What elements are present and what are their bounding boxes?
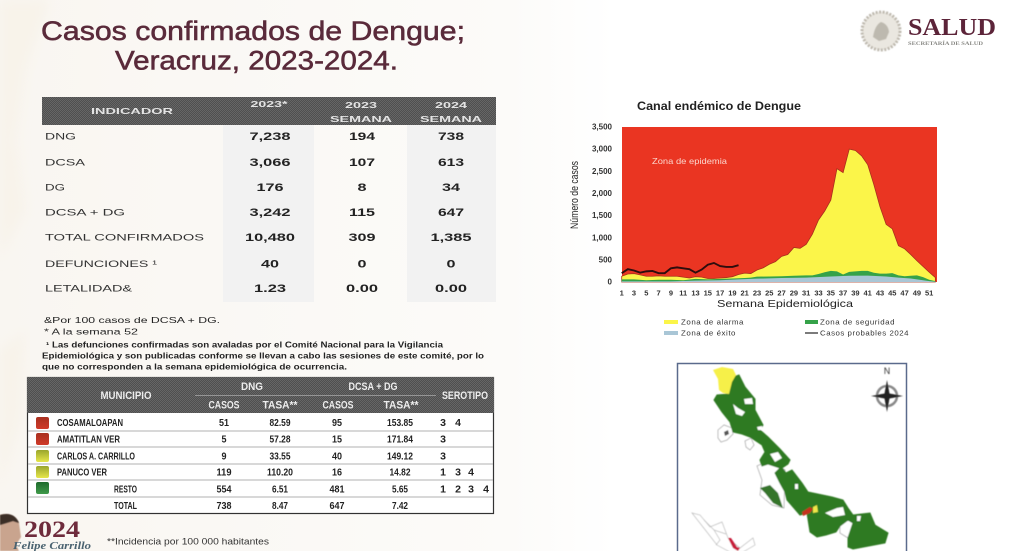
row: Resto: 481 [330, 484, 345, 496]
chart legend [664, 318, 909, 338]
row: Cosamaloapan: 51 [219, 417, 229, 429]
chart title: Canal endémico de Dengue [637, 101, 801, 113]
row: Carlos A. Carrillo: 149.12 [387, 450, 413, 462]
x axis: 31 [802, 288, 810, 298]
y axis: 0 [608, 278, 613, 286]
x axis: 23 [753, 288, 761, 298]
row: defunciones [45, 258, 456, 270]
icon: compass [871, 366, 903, 412]
table header: 2023 [345, 100, 377, 110]
row: Amatitlan: AMATITLAN VER [57, 434, 120, 446]
logo: Salud: SECRETARÍA DE SALUD [908, 39, 983, 47]
y axis: 2,000 [592, 189, 613, 198]
row: Panuco: 14.82 [390, 466, 411, 478]
row: Resto: 6.51 [272, 484, 288, 496]
x axis [620, 288, 933, 310]
row: DG: DG [45, 182, 65, 194]
x axis: 37 [839, 288, 847, 298]
map: Mexico inset [692, 513, 755, 551]
row: DG: 8 [358, 182, 366, 194]
row: DNG [45, 131, 464, 143]
map: white gaps [733, 398, 861, 521]
x axis: 35 [827, 288, 835, 298]
row: Panuco: PANUCO VER [57, 466, 107, 478]
row: Carlos A. Carrillo [36, 450, 446, 462]
x axis: 1 [620, 288, 624, 298]
map: Carlos A. Carrillo yellow [813, 505, 818, 513]
row: letalidad [45, 283, 467, 295]
chart legend: Casos probables 2024 [820, 328, 909, 338]
x axis: 43 [876, 288, 884, 298]
row: Panuco: 3 [455, 466, 461, 478]
row: Total [114, 500, 408, 512]
row: DCSA: 613 [438, 157, 464, 169]
row: Resto: 1 [440, 484, 446, 496]
row: DCSA + DG: DCSA + DG [45, 208, 125, 218]
municipios header: DCSA + DG [348, 381, 398, 393]
row: defunciones: DEFUNCIONES ¹ [45, 259, 157, 270]
municipios header: CASOS [322, 400, 354, 412]
map: green municipalities [714, 375, 888, 549]
row: Total: 738 [216, 500, 232, 512]
row: DNG: 7,238 [250, 131, 290, 143]
logo: Salud: SALUD [908, 15, 996, 41]
table: indicadores [42, 97, 496, 302]
chart: canal endémico de Dengue [569, 101, 937, 338]
logo: Salud [862, 12, 996, 50]
x axis: 7 [657, 288, 661, 298]
footnotes: &Por 100 casos de DCSA + DG. [44, 316, 220, 325]
table header [42, 97, 496, 125]
municipios header [27, 377, 494, 413]
footnotes: que no corresponden a la semana epidemiológica de ocurrencia. [42, 362, 347, 372]
row: Resto: 5.65 [392, 484, 408, 496]
municipios header: MUNICIPIO [100, 390, 152, 402]
x axis: 27 [777, 288, 786, 298]
x axis: 45 [888, 288, 896, 298]
row: DCSA + DG: 115 [349, 207, 375, 219]
x axis: 19 [728, 288, 737, 298]
x axis: 51 [925, 288, 933, 298]
row: Panuco [36, 466, 474, 478]
row: total confirmados: TOTAL CONFIRMADOS [45, 232, 204, 244]
map: Veracruz [678, 364, 906, 551]
row: total confirmados: 1,385 [430, 232, 472, 244]
row: defunciones: 0 [358, 258, 366, 270]
table header: INDICADOR [91, 106, 173, 116]
municipios header: DNG [241, 381, 263, 393]
table header: SEMANA [330, 114, 392, 124]
row: Carlos A. Carrillo: 33.55 [270, 450, 291, 462]
row: Cosamaloapan [36, 417, 461, 429]
y axis [569, 122, 613, 286]
row: Amatitlan: 171.84 [387, 434, 413, 446]
y axis: 3,000 [592, 144, 613, 154]
x axis: 47 [900, 288, 909, 298]
row: DNG: 738 [438, 131, 464, 143]
row: total confirmados: 10,480 [245, 232, 295, 244]
row: Amatitlan: 15 [332, 434, 342, 446]
x axis: 17 [716, 288, 724, 298]
y axis: 1,000 [592, 234, 613, 242]
row: DG [45, 182, 461, 194]
row: DG: 34 [442, 182, 461, 194]
row: Carlos A. Carrillo: 9 [222, 450, 227, 462]
row: Amatitlan: 5 [222, 434, 227, 446]
x axis: 21 [741, 288, 749, 298]
row: Cosamaloapan: COSAMALOAPAN [57, 417, 123, 429]
row: DG: 176 [256, 182, 284, 194]
plot areas [622, 127, 937, 282]
x axis: 5 [644, 288, 648, 298]
x axis: 41 [864, 288, 872, 298]
row: Resto: 2 [455, 484, 461, 496]
municipios header: SEROTIPO [442, 390, 488, 402]
row: DCSA + DG [45, 207, 464, 219]
table header: 2024 [435, 100, 467, 110]
row: Total: 7.42 [392, 500, 408, 512]
row: DNG: 194 [349, 131, 376, 143]
x axis: 13 [691, 288, 700, 298]
x axis: 49 [913, 288, 921, 298]
title: Veracruz, 2023-2024. [115, 46, 398, 76]
row: Resto: 554 [216, 484, 232, 496]
footnotes: Epidemiológica y son publicadas conforme se llevan a cabo las sesiones de este comité, por lo [42, 352, 484, 360]
row: Panuco: 110.20 [267, 466, 293, 478]
municipios header: TASA** [384, 400, 419, 412]
row: Amatitlan [36, 433, 446, 446]
map: white municipalities [718, 425, 853, 538]
row: DCSA: 3,066 [250, 157, 290, 169]
row: Panuco: 1 [440, 466, 446, 478]
row: Amatitlan: 3 [440, 434, 446, 446]
footer logo: 2024 Felipe Carrillo: 2024 [24, 517, 81, 542]
plot areas: Zona de epidemia [652, 156, 727, 166]
row: Carlos A. Carrillo: 40 [332, 450, 342, 462]
row: Amatitlan: 57.28 [270, 434, 291, 446]
municipios header: CASOS [208, 400, 240, 412]
row: Resto: 3 [468, 484, 474, 496]
row: Total: TOTAL [114, 500, 137, 512]
icon: compass: N [884, 366, 890, 376]
row: total confirmados [45, 232, 472, 244]
row: DCSA + DG: 647 [438, 207, 464, 219]
table header: SEMANA [420, 114, 482, 124]
row: Panuco: 119 [216, 466, 232, 478]
y axis: 500 [599, 256, 613, 264]
x axis: Semana Epidemiológica [717, 298, 853, 310]
title: Casos confirmados de Dengue; [41, 16, 465, 46]
row: Cosamaloapan: 95 [332, 417, 342, 429]
row: letalidad: LETALIDAD& [45, 284, 133, 294]
y axis: 1,500 [592, 211, 613, 220]
x axis: 29 [790, 288, 798, 298]
map: green patch among white municipalities [760, 485, 783, 508]
row: DCSA: 107 [349, 157, 375, 169]
row: Resto: RESTO [114, 484, 137, 496]
row: defunciones: 0 [446, 258, 456, 270]
row: Total: 8.47 [272, 500, 288, 512]
municipios header: TASA** [262, 400, 298, 412]
row: Cosamaloapan: 4 [455, 417, 461, 429]
map: Panuco yellow [713, 367, 736, 394]
row: Total: 647 [330, 500, 345, 512]
row: DCSA [45, 157, 464, 169]
row: Carlos A. Carrillo: CARLOS A. CARRILLO [57, 450, 135, 462]
table: municipios [27, 377, 494, 514]
x axis: 3 [632, 288, 636, 298]
x axis: 15 [704, 288, 712, 298]
row: letalidad: 0.00 [346, 283, 378, 295]
row: DCSA + DG: 3,242 [250, 207, 290, 219]
y axis: Número de casos [569, 161, 581, 229]
row: Resto [36, 482, 489, 496]
row: DCSA: DCSA [45, 158, 86, 168]
x axis: 9 [669, 288, 673, 298]
footnotes: ¹ Las defunciones confirmadas son avaladas por el Comité Nacional para la Vigilancia [46, 340, 444, 350]
row: Panuco: 4 [468, 466, 474, 478]
x axis: 39 [851, 288, 860, 298]
row: letalidad: 0.00 [435, 283, 467, 295]
x axis: 25 [765, 288, 773, 298]
chart legend: Zona de alarma [681, 318, 744, 326]
footnotes: * A la semana 52 [44, 328, 139, 336]
row: letalidad: 1.23 [254, 283, 286, 295]
chart legend: Zona de seguridad [820, 318, 895, 326]
footnote: incidencia: **Incidencia por 100 000 habitantes [107, 536, 270, 546]
row: Cosamaloapan: 3 [440, 417, 446, 429]
x axis: 33 [814, 288, 823, 298]
row: Carlos A. Carrillo: 3 [440, 450, 446, 462]
table header: 2023* [250, 99, 289, 109]
footer logo: 2024 Felipe Carrillo [0, 514, 92, 551]
footnotes [42, 316, 484, 372]
row: DNG: DNG [45, 132, 76, 142]
row: total confirmados: 309 [348, 232, 376, 244]
row: Resto: 4 [483, 484, 489, 496]
row: Cosamaloapan: 82.59 [270, 417, 291, 429]
x axis: 11 [679, 288, 687, 298]
chart legend: Zona de éxito [681, 328, 736, 338]
y axis: 2,500 [592, 167, 613, 176]
row: Panuco: 16 [332, 466, 342, 478]
row: defunciones: 40 [261, 258, 279, 270]
title [41, 16, 465, 76]
row: Cosamaloapan: 153.85 [387, 417, 413, 429]
y axis: 3,500 [592, 122, 613, 132]
map: Cosamaloapan red [802, 507, 813, 516]
